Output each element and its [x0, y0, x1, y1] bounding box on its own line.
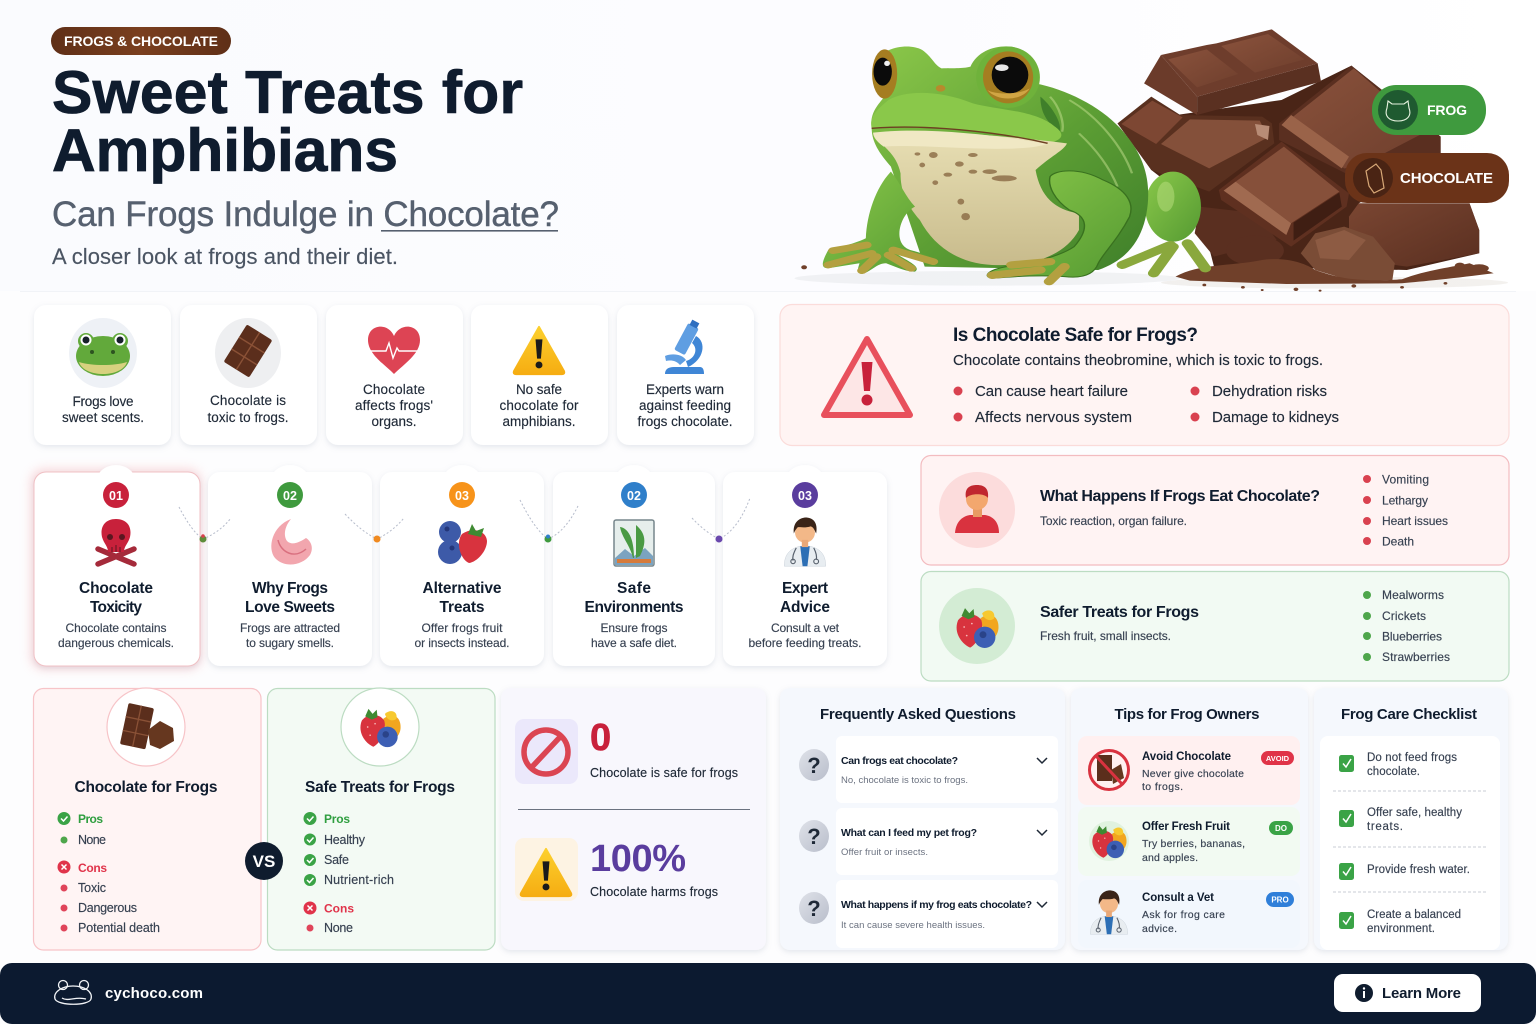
tag: frog: FROG	[1427, 102, 1467, 118]
step 5: Expert	[782, 580, 828, 597]
tip: fresh fruit: Offer Fresh Fruit	[1142, 821, 1230, 833]
pros and cons list: Cons	[324, 902, 354, 916]
subtitle: Can Frogs Indulge in Chocolate?	[52, 195, 559, 234]
panel: safer treats: Fresh fruit, small insects.	[1040, 629, 1171, 643]
risk list: Damage to kidneys	[1212, 409, 1339, 426]
panel: is chocolate safe	[780, 304, 1509, 446]
step 4: 02	[627, 489, 641, 503]
faq item 3: What happens if my frog eats chocolate?	[841, 899, 1032, 911]
tip: consult a vet	[1078, 880, 1300, 948]
tip: fresh fruit	[1078, 807, 1300, 876]
tag: chocolate	[1345, 153, 1509, 203]
fact card: sweet scents	[34, 305, 171, 445]
icon: heart with pulse	[368, 327, 420, 374]
faq item 1: ?	[807, 753, 821, 778]
fact card: no safe chocolate	[471, 305, 608, 445]
symptom list: Vomiting	[1382, 472, 1429, 486]
symptom list: Death	[1382, 534, 1414, 548]
vs badge	[245, 842, 283, 880]
step 1	[30, 465, 202, 670]
icon: frog outline	[1386, 101, 1410, 121]
step 4: Safe	[617, 580, 651, 597]
illustration: frog and chocolate	[794, 29, 1508, 292]
badge: pro	[1266, 892, 1294, 907]
step 5: Consult a vet	[771, 621, 840, 635]
badge: pro: PRO	[1271, 896, 1289, 904]
step 3: 03	[455, 489, 469, 503]
button: learn more	[1334, 974, 1481, 1012]
tip: avoid chocolate: to frogs.	[1142, 781, 1183, 793]
step 2: Love Sweets	[245, 599, 335, 616]
panel: what happens: Toxic reaction, organ failure.	[1040, 514, 1187, 528]
check item 3: Provide fresh water.	[1367, 864, 1470, 876]
fact card: no safe chocolate: chocolate for	[500, 398, 579, 413]
step 2: to sugary smells.	[246, 636, 334, 650]
pros and cons list: None	[324, 921, 353, 935]
fact card: organs	[326, 305, 463, 445]
title: Amphibians	[52, 116, 398, 184]
tip: consult a vet: Consult a Vet	[1142, 892, 1214, 904]
hero panel	[0, 0, 1536, 292]
icon: microscope	[665, 319, 704, 374]
panel: is chocolate safe: Chocolate contains theobromine, which is toxic to frogs.	[953, 352, 1323, 369]
panel: faq	[780, 688, 1065, 950]
icon: berries	[438, 521, 487, 564]
vs badge: VS	[253, 852, 275, 871]
safe food list: Mealworms	[1382, 588, 1444, 602]
faq item 1: No, chocolate is toxic to frogs.	[841, 775, 968, 786]
icon: fruit	[341, 688, 419, 766]
pros and cons list: Dangerous	[78, 901, 137, 915]
badge: do	[1269, 821, 1293, 835]
check item 2: Offer safe, healthy	[1367, 807, 1462, 819]
panel: statistics	[501, 688, 766, 950]
stat: zero safe	[515, 717, 738, 784]
footer: cychoco.com	[105, 985, 203, 1002]
panel: tips: Tips for Frog Owners	[1114, 706, 1260, 723]
check item 4: Create a balanced	[1367, 909, 1461, 921]
fact card: organs: Chocolate	[363, 382, 425, 397]
safe food list: Strawberries	[1382, 650, 1450, 664]
panel: safer treats: Safer Treats for Frogs	[1040, 604, 1199, 621]
pros and cons list: Safe	[324, 853, 349, 867]
tag: frog	[1372, 85, 1486, 135]
step 4: Ensure frogs	[600, 621, 668, 635]
chocolate pile	[801, 29, 1508, 292]
badge: avoid: AVOID	[1266, 754, 1290, 763]
fact card: experts: Experts warn	[646, 382, 724, 397]
pros and cons list: Potential death	[78, 921, 160, 935]
panel: tips	[1071, 688, 1308, 950]
icon: danger triangle	[824, 339, 910, 415]
faq item 3: It can cause severe health issues.	[841, 920, 985, 931]
step 1: 01	[109, 489, 123, 503]
risk list	[954, 383, 1339, 426]
risk list: Can cause heart failure	[975, 383, 1128, 400]
step 2: Frogs are attracted	[240, 621, 340, 635]
panel: safe treats for frogs	[268, 688, 495, 950]
pros and cons list	[58, 812, 160, 935]
icon: frog face	[69, 318, 137, 388]
panel: chocolate for frogs	[34, 688, 261, 950]
fact card: sweet scents: Frogs love	[72, 394, 134, 409]
icon: frog logo	[55, 980, 91, 1004]
step 3: or insects instead.	[414, 636, 510, 650]
panel: is chocolate safe: Is Chocolate Safe for Frogs?	[953, 325, 1198, 346]
faq item 2: What can I feed my pet frog?	[841, 827, 977, 839]
step 2: Why Frogs	[252, 580, 328, 597]
step 5	[723, 465, 887, 666]
stat: zero safe: Chocolate is safe for frogs	[590, 766, 738, 780]
icon: sick person	[939, 472, 1015, 548]
button: learn more: Learn More	[1382, 985, 1461, 1002]
faq item 2	[799, 808, 1058, 875]
fact card: experts: against feeding	[639, 398, 731, 413]
icon: doctor	[784, 517, 826, 566]
fact card: toxic: toxic to frogs.	[208, 410, 288, 425]
badge: frogs and chocolate: FROGS & CHOCOLATE	[64, 33, 218, 49]
fact card: organs: organs.	[372, 414, 416, 429]
frog	[794, 46, 1205, 286]
pros and cons list: None	[78, 833, 106, 847]
safe food list	[1363, 588, 1450, 664]
icon: warning triangle	[514, 327, 564, 374]
step 1: Chocolate	[79, 580, 153, 597]
faq item 1	[799, 736, 1058, 803]
tip: avoid chocolate	[1078, 736, 1300, 805]
faq item 1: Can frogs eat chocolate?	[841, 755, 958, 767]
icon: chocolate pieces	[107, 688, 185, 766]
fact card: toxic	[180, 305, 317, 445]
fact card: experts	[617, 305, 754, 445]
safe food list: Blueberries	[1382, 630, 1442, 644]
check item 4	[1339, 909, 1461, 935]
tip: consult a vet: advice.	[1142, 923, 1177, 935]
fact card: sweet scents: sweet scents.	[62, 410, 144, 425]
icon: fruit circle	[939, 588, 1015, 664]
panel: chocolate for frogs: Chocolate for Frogs	[74, 779, 218, 796]
panel: safer treats	[921, 572, 1509, 681]
title: Sweet Treats for	[52, 58, 523, 126]
faq item 2: Offer fruit or insects.	[841, 847, 928, 858]
badge: frogs and chocolate	[51, 27, 231, 55]
tip: avoid chocolate: Never give chocolate	[1142, 768, 1244, 780]
stat: hundred percent harm: 100%	[590, 838, 686, 880]
step 3: Alternative	[422, 580, 502, 597]
fact cards row	[34, 305, 754, 445]
badge: do: DO	[1275, 824, 1287, 833]
check item 2	[1339, 807, 1462, 833]
pros and cons list	[304, 812, 394, 935]
fact card: no safe chocolate: amphibians.	[502, 414, 576, 429]
tagline: A closer look at frogs and their diet.	[52, 244, 398, 269]
fact card: toxic: Chocolate is	[210, 393, 286, 408]
step 1: Toxicity	[90, 599, 142, 616]
icon: skull	[98, 519, 134, 564]
check item 1: Do not feed frogs	[1367, 752, 1457, 764]
symptom list	[1363, 472, 1448, 548]
risk list: Affects nervous system	[975, 409, 1132, 426]
footer	[0, 963, 1536, 1024]
step 1: Chocolate contains	[66, 621, 166, 635]
step 3: Treats	[440, 599, 484, 616]
pros and cons list: Toxic	[78, 881, 106, 895]
check item 3	[1339, 863, 1470, 880]
panel: what happens	[921, 456, 1509, 565]
fact card: organs: affects frogs'	[355, 398, 433, 413]
connectors between steps	[179, 498, 750, 542]
step 4: Environments	[584, 599, 684, 616]
frog eyes	[872, 47, 1040, 108]
stat: zero safe: 0	[590, 717, 611, 759]
panel: checklist: Frog Care Checklist	[1341, 706, 1477, 723]
panel: faq: Frequently Asked Questions	[820, 706, 1016, 723]
symptom list: Lethargy	[1382, 494, 1428, 508]
pros and cons list: Healthy	[324, 833, 366, 847]
step 5: 03	[798, 489, 812, 503]
step 2	[208, 465, 372, 666]
stat: hundred percent harm: Chocolate harms frogs	[590, 885, 718, 899]
stat: hundred percent harm	[515, 838, 718, 901]
title	[52, 58, 523, 184]
fact card: experts: frogs chocolate.	[638, 414, 732, 429]
tag: chocolate: CHOCOLATE	[1400, 170, 1493, 187]
step 3: Offer frogs fruit	[422, 621, 503, 635]
pros and cons list: Pros	[324, 812, 350, 826]
step 4: have a safe diet.	[591, 636, 677, 650]
step 5: Advice	[780, 599, 830, 616]
icon: chocolate outline	[1366, 164, 1384, 193]
icon: chocolate bar	[215, 318, 281, 388]
step 5: before feeding treats.	[748, 636, 862, 650]
tip: fresh fruit: Try berries, bananas,	[1142, 838, 1245, 850]
risk list: Dehydration risks	[1212, 383, 1327, 400]
faq item 2: ?	[807, 824, 821, 849]
panel: checklist	[1314, 688, 1508, 950]
pros and cons list: Pros	[78, 812, 103, 826]
numbered steps	[30, 465, 887, 670]
faq item 3: ?	[807, 896, 821, 921]
check item 2: treats.	[1367, 821, 1403, 833]
tip: consult a vet: Ask for frog care	[1142, 909, 1225, 921]
safe food list: Crickets	[1382, 609, 1426, 623]
icon: terrarium	[614, 520, 654, 566]
fact card: no safe chocolate: No safe	[516, 382, 562, 397]
tip: fresh fruit: and apples.	[1142, 852, 1198, 864]
pros and cons list: Cons	[78, 861, 107, 875]
check item 4: environment.	[1367, 923, 1435, 935]
panel: safe treats for frogs: Safe Treats for Frogs	[305, 779, 455, 796]
check item 1: chocolate.	[1367, 766, 1420, 778]
icon: pink swirl	[271, 519, 312, 564]
panel: what happens: What Happens If Frogs Eat Chocolate?	[1040, 488, 1320, 505]
step 2: 02	[283, 489, 297, 503]
tip: avoid chocolate: Avoid Chocolate	[1142, 751, 1231, 763]
step 4	[553, 465, 715, 666]
check item 1	[1339, 752, 1457, 778]
step 3	[380, 465, 544, 666]
step 1: dangerous chemicals.	[58, 636, 174, 650]
pros and cons list: Nutrient-rich	[324, 873, 394, 887]
symptom list: Heart issues	[1382, 514, 1448, 528]
badge: avoid	[1261, 751, 1294, 765]
faq item 3	[799, 880, 1058, 948]
